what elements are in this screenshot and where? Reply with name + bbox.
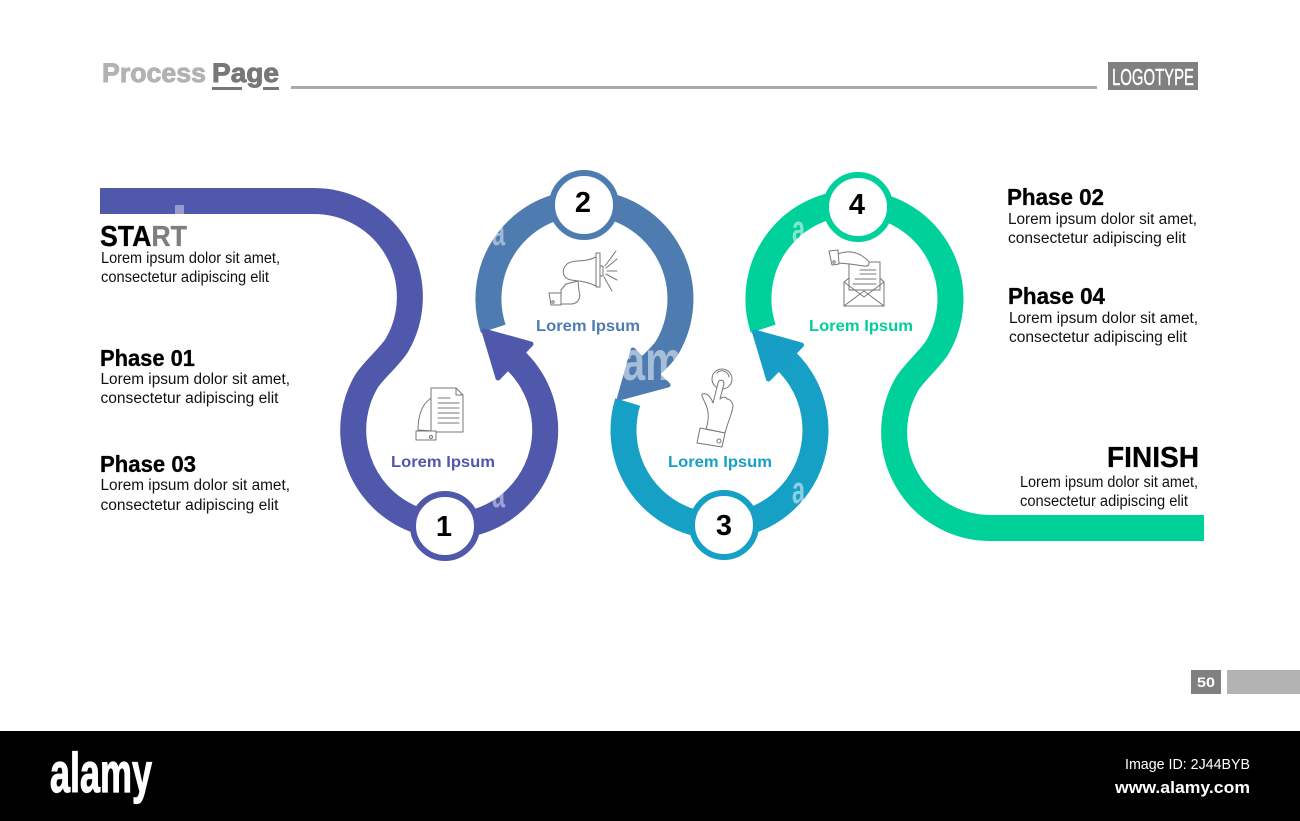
node 3: 3 — [716, 510, 732, 542]
icon: hand with megaphone — [549, 251, 617, 305]
header — [102, 58, 1198, 90]
node 3 — [692, 493, 756, 557]
step 3 arrow head — [754, 332, 802, 379]
text block: Phase 02: Phase 02 — [1007, 184, 1104, 210]
logotype badge — [1108, 62, 1198, 90]
node 2 — [552, 173, 616, 237]
step 2 band — [488, 203, 680, 382]
text block: Phase 04: Phase 04 — [1008, 283, 1105, 309]
text block: Phase 02: consectetur adipiscing elit — [1008, 230, 1187, 247]
label: Lorem Ipsum step 2: Lorem Ipsum — [536, 318, 640, 335]
watermark fragments: a — [492, 474, 506, 516]
title: Process Page: Page — [212, 58, 279, 88]
page number: 50 — [1197, 674, 1215, 690]
text block: Phase 03: Phase 03 — [100, 451, 196, 477]
icon: hand holding document — [416, 388, 463, 440]
text block: FINISH — [1020, 442, 1199, 510]
node 1 — [413, 494, 477, 558]
text block: Phase 04 — [1008, 283, 1198, 346]
step 4 and finish band — [758, 203, 1204, 528]
label: Lorem Ipsum step 4: Lorem Ipsum — [809, 318, 913, 335]
step 1 arrow head — [484, 331, 531, 378]
alamy logo: alamy — [50, 741, 152, 804]
icon: hand posting envelope — [829, 250, 884, 306]
step 3 band — [624, 354, 816, 526]
text block: START — [100, 221, 280, 286]
icon: finger pressing button — [697, 369, 733, 447]
start and step 1 band — [100, 201, 545, 526]
image id: Image ID: 2J44BYB — [1125, 756, 1250, 773]
process path — [100, 201, 1204, 528]
text block: Phase 02: Lorem ipsum dolor sit amet, — [1008, 211, 1197, 228]
text block: Phase 01: consectetur adipiscing elit — [100, 390, 279, 407]
website: www.alamy.com — [1114, 778, 1250, 797]
watermark fragments: a — [792, 209, 806, 251]
label: Lorem Ipsum step 3: Lorem Ipsum — [668, 454, 772, 471]
node 4: 4 — [849, 189, 865, 221]
text block: FINISH: Lorem ipsum dolor sit amet, — [1020, 474, 1198, 491]
label: Lorem Ipsum step 1: Lorem Ipsum — [391, 454, 495, 471]
watermark fragments: a — [492, 212, 506, 254]
title: Process Page: Process — [102, 58, 206, 88]
text block: START: Lorem ipsum dolor sit amet, — [101, 250, 280, 267]
node 4 — [826, 175, 890, 239]
node 1: 1 — [436, 511, 452, 543]
text block: FINISH: FINISH — [1107, 442, 1199, 474]
text block: Phase 03 — [100, 451, 290, 514]
text block: Phase 01: Lorem ipsum dolor sit amet, — [100, 371, 290, 388]
text block: START: consectetur adipiscing elit — [101, 269, 270, 286]
text block: Phase 01: Phase 01 — [100, 345, 195, 371]
text block: FINISH: consectetur adipiscing elit — [1020, 493, 1189, 510]
page number — [1191, 670, 1300, 694]
text block: Phase 04: Lorem ipsum dolor sit amet, — [1009, 310, 1198, 327]
footer bar — [0, 731, 1300, 821]
text block: START: START — [100, 221, 187, 253]
watermark fragments: a — [792, 470, 806, 512]
logotype badge: LOGOTYPE — [1112, 64, 1194, 90]
text block: Phase 04: consectetur adipiscing elit — [1009, 329, 1188, 346]
text block: Phase 01 — [100, 345, 290, 407]
step 2 arrow head — [620, 350, 668, 398]
text block: Phase 02 — [1007, 184, 1197, 247]
node 2: 2 — [575, 187, 591, 219]
watermark fragments — [175, 205, 806, 516]
text block: Phase 03: consectetur adipiscing elit — [100, 497, 279, 514]
watermark fragments: am — [622, 329, 682, 392]
title: Process Page — [102, 58, 279, 90]
text block: Phase 03: Lorem ipsum dolor sit amet, — [100, 477, 290, 494]
